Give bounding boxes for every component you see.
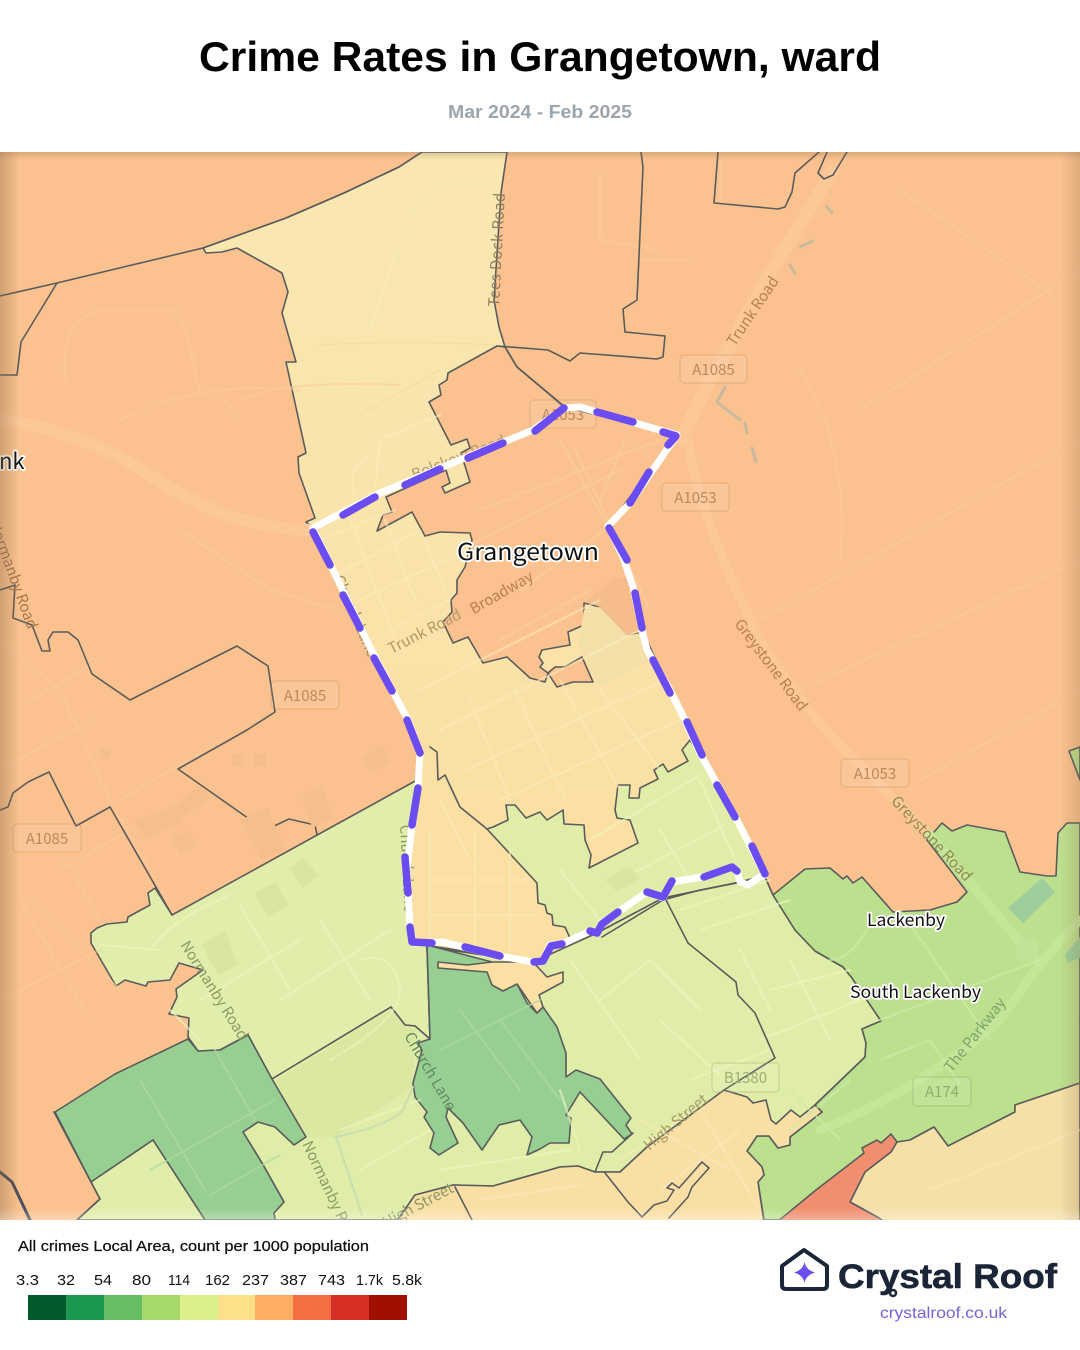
logo: Crystal Roof: [782, 1250, 1058, 1322]
park field tints: [202, 858, 640, 975]
map edge vignette: [0, 152, 1080, 1220]
shield: A1053 south-east: A1053: [854, 763, 896, 784]
website: crystalroof.co.uk: [880, 1305, 1008, 1322]
shield: A1085 west: [271, 681, 339, 709]
boundaries: area lines: [0, 152, 847, 1220]
label: Greystone Road north: Greystone Road: [730, 614, 813, 715]
label: Church Lane south: Church Lane: [400, 1028, 462, 1114]
shield: A1085 west: A1085: [284, 685, 326, 706]
region: right-edge pond green: [1065, 937, 1080, 963]
region: Lackenby mid green: [747, 823, 1080, 1220]
region: ward south-east light green: [487, 740, 765, 938]
shield: A1085 north: [680, 355, 747, 383]
legend values: 237: [242, 1272, 269, 1289]
legend values: 80: [132, 1272, 151, 1289]
legend values: 114: [168, 1272, 190, 1289]
wordmark tail dot: [890, 1290, 896, 1296]
label: Trunk Road centre: Trunk Road: [384, 604, 465, 659]
shield: A1053 centre: A1053: [542, 404, 584, 425]
legend colour scale: [28, 1295, 407, 1320]
label: The Parkway: The Parkway: [939, 993, 1011, 1076]
region: central dark green: [413, 945, 632, 1155]
label: Greystone Road south: Greystone Road: [887, 791, 977, 886]
label: Normanby Road south: Normanby Road: [297, 1137, 365, 1249]
road shields: [13, 355, 971, 1106]
legend values: 5.8k: [392, 1272, 423, 1289]
legend title: All crimes Local Area, count per 1000 population: [18, 1239, 369, 1255]
region: south yellow town: [396, 1090, 822, 1222]
region: south-west dark green: [55, 1035, 306, 1220]
region: top-right green corner: [1069, 747, 1080, 780]
legend: [16, 1239, 423, 1320]
ward boundary: white base: [313, 407, 765, 962]
region: red high-crime area: [777, 1134, 897, 1222]
legend values: 54: [94, 1272, 112, 1289]
region: west light green: [91, 780, 430, 1079]
shield: A1085 far west: [13, 824, 81, 852]
legend values: [16, 1272, 423, 1289]
legend values: 3.3: [16, 1272, 39, 1289]
shield: A174: A174: [925, 1081, 959, 1102]
legend values: 32: [57, 1272, 75, 1289]
region: sports field green: [1008, 878, 1055, 923]
region: darker orange patch: [592, 604, 639, 635]
legend values: 743: [318, 1272, 345, 1289]
wordmark: Crystal Roof: [838, 1258, 1058, 1296]
label: Bolckow Road: Bolckow Road: [408, 430, 508, 485]
road network: faint streets: [0, 160, 1080, 1215]
region: light green rectangle: [77, 1140, 205, 1220]
boundary: inner ward line: [430, 747, 487, 829]
region: small orange parcel: [548, 657, 593, 687]
place label: South Lackenby: South Lackenby: [850, 978, 981, 1003]
region: south yellow lobe: [438, 962, 563, 1013]
region: northern and central yellow band: [202, 152, 690, 958]
label: Broadway: Broadway: [466, 565, 537, 619]
legend values: 387: [280, 1272, 307, 1289]
place label: Grangetown: Grangetown: [457, 533, 599, 567]
ward boundary: purple dashes: [313, 408, 765, 962]
label: High Street east: High Street: [639, 1088, 712, 1155]
subtitle: date range: Mar 2024 - Feb 2025: [448, 102, 632, 122]
building footprints: [200, 785, 316, 829]
region: south light green: [243, 877, 881, 1220]
place label: Lackenby: Lackenby: [867, 906, 945, 931]
legend values: 1.7k: [356, 1272, 383, 1289]
label: Trunk Road north: Trunk Road: [721, 272, 783, 350]
road name labels: [0, 192, 1011, 1249]
region: central Grangetown orange: [377, 346, 677, 682]
label: Tees Dock Road: Tees Dock Road: [483, 192, 510, 307]
shield: B1380: [712, 1063, 779, 1092]
region: south-east pale yellow: [850, 1083, 1080, 1222]
icon: house with star: [782, 1250, 827, 1289]
shield: A1053 east: A1053: [674, 487, 717, 508]
title: Crime Rates in Grangetown, ward: [199, 33, 881, 80]
shield: A1053 south-east: [841, 759, 909, 787]
shield: B1380: B1380: [724, 1067, 767, 1088]
label: Normanby Road west: Normanby Road: [176, 936, 254, 1044]
label: Church Lane upper: Church Lane: [328, 571, 383, 660]
shield: A1085 far west: A1085: [26, 828, 68, 849]
shield: A1085 north: A1085: [692, 359, 735, 380]
label: High Street west: High Street: [378, 1177, 457, 1232]
region: beige open land: [581, 607, 633, 636]
region: slightly darker fields west of Church Lane: [274, 1009, 415, 1137]
legend values: 162: [205, 1272, 230, 1289]
shield: A1053 centre: [530, 400, 596, 428]
label: Church Lane ward: Church Lane: [395, 824, 421, 913]
shield: A1053 east: [662, 483, 729, 511]
shield: A174: [913, 1077, 971, 1106]
